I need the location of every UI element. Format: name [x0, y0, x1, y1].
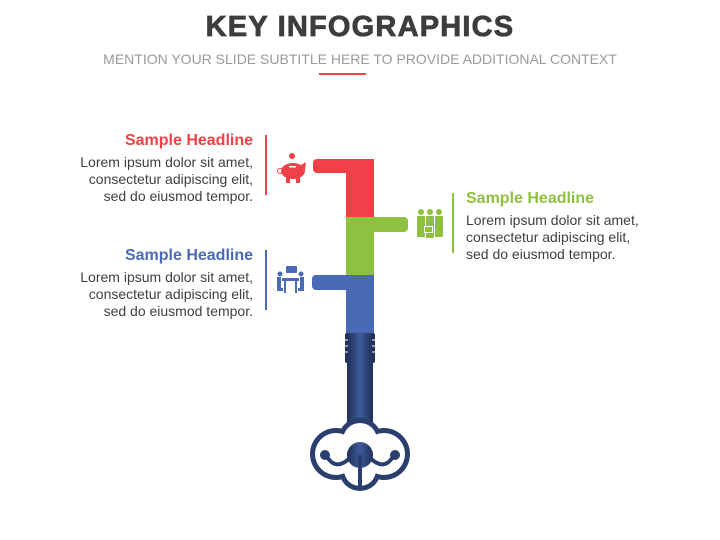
text block: blue [80, 247, 253, 319]
key segment: red [313, 159, 374, 217]
text block: blue: Lorem ipsum dolor sit amet, [80, 269, 253, 285]
text block: red: consectetur adipiscing elit, [89, 171, 253, 187]
text block: blue: consectetur adipiscing elit, [89, 286, 253, 302]
text block: green: consectetur adipiscing elit, [466, 229, 630, 245]
text block: blue: Sample Headline [125, 247, 253, 264]
key segment: blue [312, 275, 374, 333]
text block: green: sed do eiusmod tempor. [466, 246, 615, 262]
icon: business team [417, 209, 443, 238]
text block: red [80, 132, 253, 204]
accent lines [265, 135, 454, 310]
icon: piggy bank [278, 153, 306, 183]
icon: meeting [277, 266, 304, 293]
text block: green: Lorem ipsum dolor sit amet, [466, 212, 639, 228]
text block: green: Sample Headline [466, 190, 594, 207]
key segment: green [346, 217, 408, 275]
text block: red: Lorem ipsum dolor sit amet, [80, 154, 253, 170]
text block: red: Sample Headline [125, 132, 253, 149]
key handle [310, 333, 410, 491]
title: KEY INFOGRAPHICS [206, 11, 514, 43]
text block: red: sed do eiusmod tempor. [104, 188, 253, 204]
title underline [319, 73, 366, 75]
text block: green [466, 190, 639, 262]
subtitle: MENTION YOUR SLIDE SUBTITLE HERE TO PROVIDE ADDITIONAL CONTEXT [103, 51, 617, 67]
text block: blue: sed do eiusmod tempor. [104, 303, 253, 319]
